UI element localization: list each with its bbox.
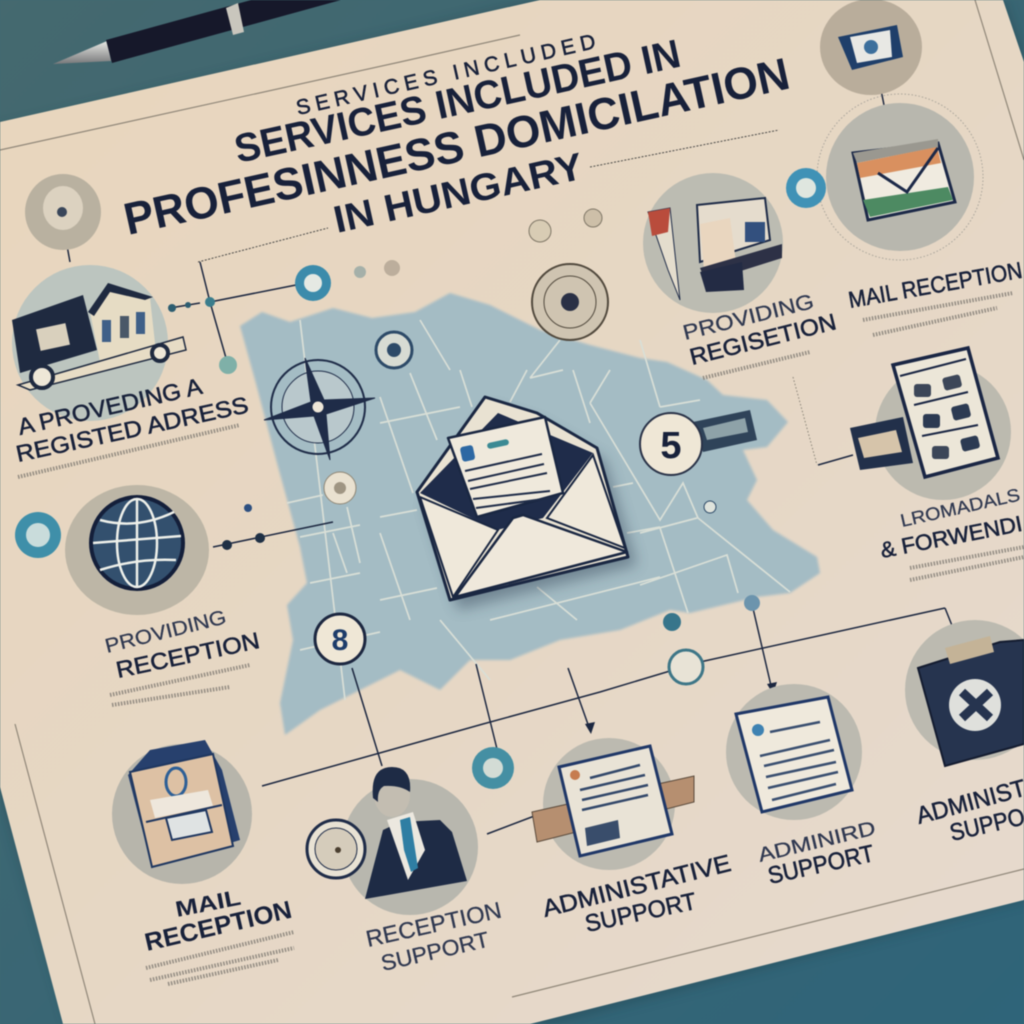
service: admin support document: ADMINIRD (756, 817, 878, 867)
service: providing registration (643, 173, 839, 378)
service: registered address: A PROVEDING A (15, 373, 205, 440)
service: mail forwarding: LROMADALS (898, 485, 1022, 531)
icon: document with folder (532, 746, 694, 856)
service: admin support document (726, 684, 878, 890)
icon: target marker (532, 264, 608, 340)
icon: globe (91, 497, 183, 589)
icon: small blue badge (15, 512, 61, 558)
service: globe / reception (15, 485, 262, 705)
service: mail reception flag envelope (786, 94, 1024, 335)
icon: blue badge (786, 168, 826, 208)
service: reception support: SUPPORT (379, 927, 491, 976)
service: reception support: RECEPTION (363, 897, 504, 952)
service: small pin top left (25, 174, 101, 250)
icon: open envelope (417, 397, 637, 610)
service: globe / reception: PROVIDING (103, 607, 229, 658)
service: registered address: REGISTED ADRESS (14, 391, 251, 467)
icon: clipboard (918, 636, 1024, 766)
service: globe / reception: RECEPTION (114, 627, 262, 683)
icon: envelope in flag colours (853, 139, 955, 220)
service: reception support (307, 767, 504, 976)
service: mail reception: MAIL (173, 885, 243, 922)
icon: mail tray (850, 348, 998, 477)
service: mail forwarding (850, 348, 1024, 580)
marker: 5: 5 (660, 425, 682, 467)
service: admin support document: SUPPORT (765, 840, 877, 890)
service: providing registration: REGISETION (687, 308, 839, 370)
icon: document (736, 697, 852, 812)
service: registered address (12, 265, 251, 477)
icon: pen and office (648, 198, 782, 300)
map markers (219, 209, 760, 789)
icon: seal (307, 820, 365, 878)
service: top right pin (820, 0, 922, 95)
service: mail forwarding: & FORWENDI (878, 511, 1024, 563)
title: IN HUNGARY (330, 146, 587, 242)
marker: 8 (315, 614, 365, 664)
title: PROFESINNESS DOMICILATION (119, 48, 794, 245)
icon: person in suit (365, 767, 467, 899)
title: SERVICES INCLUDED IN (231, 32, 684, 172)
title: SERVICES INCLUDED (294, 30, 598, 120)
pen (53, 0, 370, 64)
icon: compass (264, 358, 375, 460)
icon: parcel box (128, 740, 240, 867)
connector lines (66, 85, 962, 834)
service: administrative support clipboard (905, 620, 1024, 847)
truck and house icon (12, 265, 186, 421)
service: administrative support: SUPPORT (583, 888, 699, 938)
service: mail reception (112, 740, 295, 984)
map of Hungary (240, 293, 820, 735)
service: administrative support (532, 738, 734, 938)
service: administrative support: ADMINISTATIVE (540, 850, 734, 923)
service: providing registration: PROVIDING (681, 290, 816, 345)
marker: 5 (640, 410, 757, 475)
service: mail reception: RECEPTION (142, 896, 295, 957)
marker: 8: 8 (332, 624, 348, 657)
